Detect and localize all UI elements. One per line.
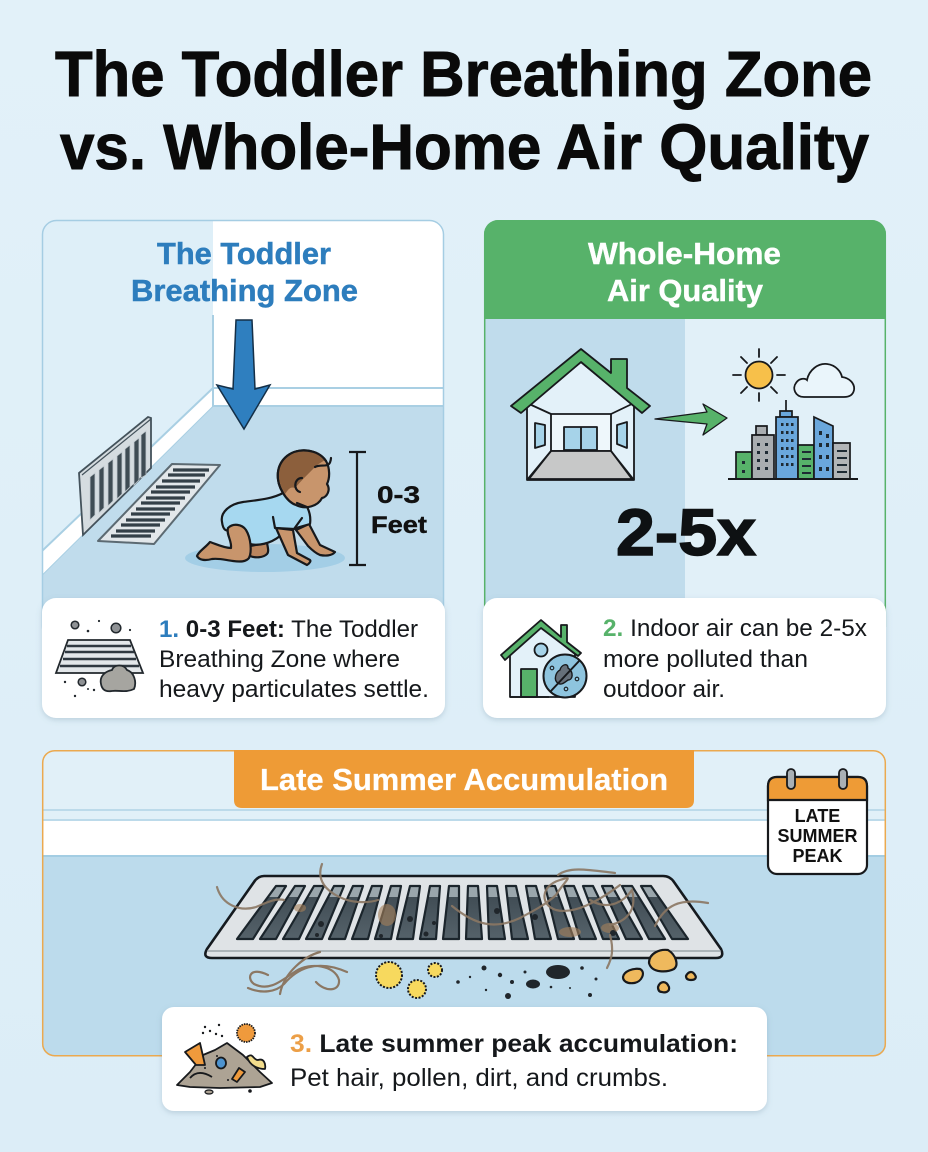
icon: calendar late summer peak [768, 769, 867, 874]
pollen [376, 962, 442, 998]
caption text 2: 2. Indoor air can be 2-5x [603, 615, 867, 642]
dust specks on vent [294, 904, 619, 937]
icon: wall vent [79, 417, 151, 535]
vent slots [237, 886, 688, 939]
icon: floor vent [98, 464, 220, 544]
icon: vent with settled dust [56, 620, 143, 697]
crumbs [623, 950, 696, 992]
panel: whole-home air quality [483, 220, 886, 718]
icon: calendar late summer peak: LATE [795, 806, 840, 826]
title: The Toddler Breathing Zone [55, 38, 872, 110]
caption text 3: Pet hair, pollen, dirt, and crumbs. [290, 1064, 668, 1092]
icon: crawling toddler [197, 450, 335, 565]
height bar: 0-3 feet [349, 452, 427, 565]
caption card 2 [483, 598, 886, 718]
icon: house with polluted air [501, 620, 586, 698]
panel heading: the toddler breathing zone [131, 236, 358, 308]
caption text 2: outdoor air. [603, 676, 725, 703]
caption card 1 [42, 598, 445, 718]
icon: city skyline [728, 400, 858, 479]
caption text 3: 3. Late summer peak accumulation: [290, 1030, 738, 1058]
hair clump [248, 952, 347, 994]
stat: 2-5x: 2-5x [616, 495, 756, 569]
far arm [296, 524, 335, 556]
caption text 1: Breathing Zone where [159, 646, 400, 673]
panel heading: whole-home air quality: Whole-Home [588, 236, 781, 271]
title [55, 38, 872, 183]
caption text 2 [603, 615, 867, 703]
icon: sun [733, 349, 785, 401]
title: vs. Whole-Home Air Quality [60, 111, 869, 183]
arrow: down to breathing zone [217, 320, 270, 429]
near leg [197, 525, 251, 562]
height bar: 0-3 feet: 0-3 [377, 482, 420, 509]
head [278, 450, 329, 507]
icon: cloud [794, 364, 854, 397]
banner: late summer accumulation [234, 750, 694, 808]
arrow: indoor to outdoor [655, 404, 727, 435]
panel heading: whole-home air quality: Air Quality [607, 273, 764, 308]
banner: late summer accumulation: Late Summer Accumulation [260, 762, 668, 797]
shadow under toddler [185, 544, 345, 572]
icon: calendar late summer peak: PEAK [792, 846, 843, 866]
caption text 1: heavy particulates settle. [159, 676, 429, 703]
caption card 3 [162, 1007, 767, 1111]
panel heading: the toddler breathing zone: Breathing Zone [131, 273, 358, 308]
near arm [276, 528, 310, 565]
caption text 1 [159, 616, 429, 703]
panel: late summer accumulation [42, 750, 886, 1111]
far leg [250, 543, 268, 557]
caption text 3 [290, 1030, 738, 1092]
caption text 1: 1. 0-3 Feet: The Toddler [159, 616, 418, 643]
panel: toddler breathing zone [42, 220, 445, 718]
icon: pile of debris [177, 1024, 272, 1094]
icon: house cross-section [511, 349, 650, 480]
body [222, 493, 310, 545]
height bar: 0-3 feet: Feet [371, 512, 427, 539]
panel heading: whole-home air quality [588, 236, 781, 308]
hair strands on vent [217, 864, 708, 968]
icon: calendar late summer peak: SUMMER [778, 826, 858, 846]
caption text 2: more polluted than [603, 646, 808, 673]
panel heading: the toddler breathing zone: The Toddler [157, 236, 331, 271]
illustration: debris below vent [248, 950, 696, 999]
illustration: dirty floor vent [205, 864, 722, 968]
dirt specks [456, 965, 598, 999]
